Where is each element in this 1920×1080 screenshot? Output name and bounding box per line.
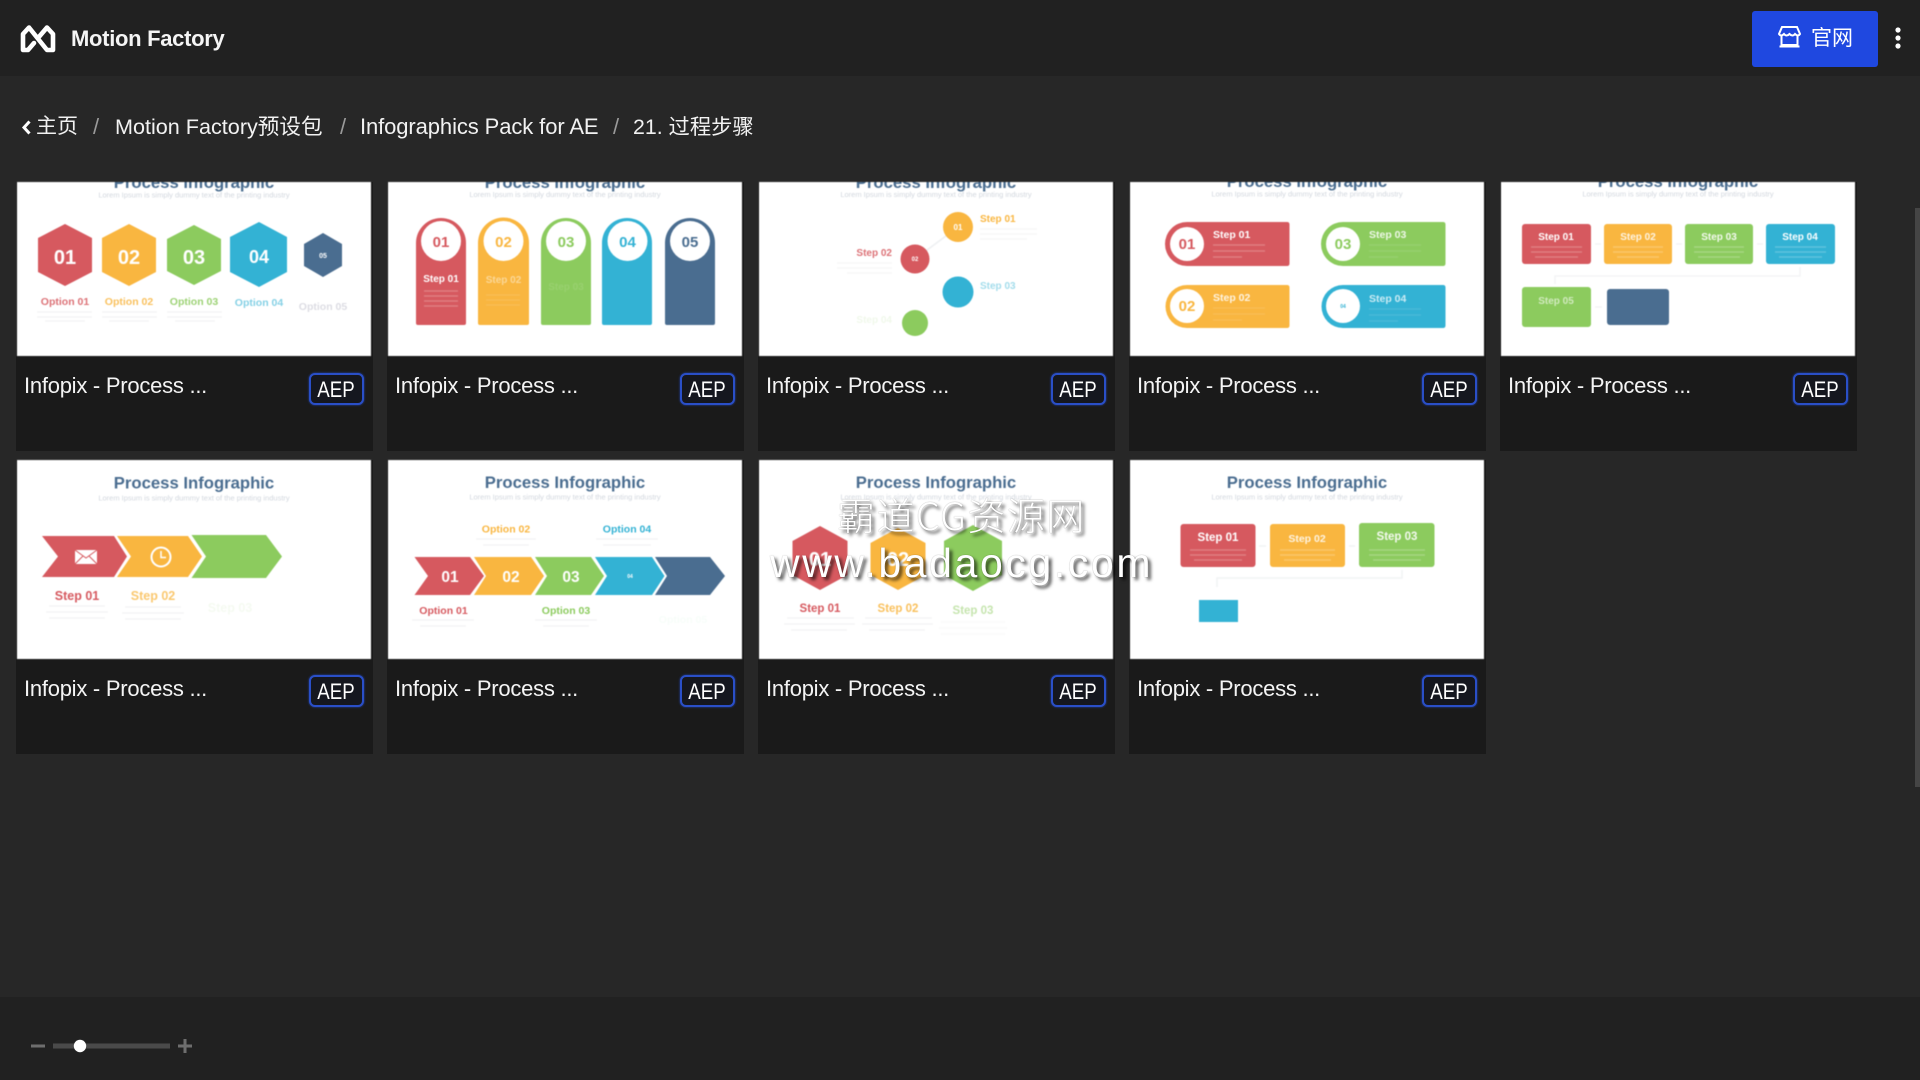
card 1: hexagon options: [16, 182, 373, 451]
thumbnail: step boxes: Lorem Ipsum is simply dummy text of the printing industry: [1211, 492, 1403, 502]
thumbnail: five arrows: 03: [562, 569, 580, 586]
AEP badge: AEP: [318, 377, 355, 402]
AEP badge: AEP: [689, 679, 726, 704]
AEP badge: [309, 675, 364, 707]
thumbnail: step boxes: Step 02: [1288, 533, 1326, 545]
thumbnail: three hexagons: Lorem Ipsum is simply dummy text of the printing industry: [840, 492, 1032, 502]
AEP badge: [1051, 373, 1106, 405]
thumbnail: hexagons: 04: [249, 247, 269, 267]
breadcrumb separator: /: [340, 114, 346, 139]
AEP badge: AEP: [1431, 679, 1468, 704]
AEP badge: AEP: [1802, 377, 1839, 402]
thumbnail: pillars: 01: [433, 234, 449, 251]
scrollbar: [1915, 208, 1920, 787]
thumbnail: pillars: Step 01: [423, 274, 459, 285]
thumbnail: three hexagons: Step 02: [878, 603, 918, 615]
thumbnail: zigzag circles: Step 01: [980, 214, 1016, 225]
thumbnail: pillars: Lorem Ipsum is simply dummy text of the printing industry: [469, 190, 661, 199]
thumbnail: three hexagons: 02: [887, 549, 909, 571]
thumbnail: five arrows: Process Infographic: [485, 473, 645, 492]
thumbnail: step tags: 04: [1340, 304, 1346, 310]
card 8: three hexagons: [758, 460, 1115, 754]
thumbnail: five arrows: [388, 460, 742, 659]
thumbnail: chevron icons: Step 01: [55, 589, 99, 603]
card 3: zigzag circles: [758, 182, 1115, 451]
thumbnail: hexagons: Option 04: [235, 297, 283, 309]
thumbnail: five arrows: 04: [627, 574, 633, 580]
thumbnail: zigzag circles: 01: [954, 223, 963, 232]
thumbnail: hexagons: 05: [319, 253, 327, 260]
thumbnail: five arrows: Option 02: [482, 524, 530, 536]
breadcrumb separator: /: [613, 114, 619, 139]
thumbnail: flow boxes: Lorem Ipsum is simply dummy text of the printing industry: [1582, 190, 1774, 198]
card title: Infopix - Process ...: [24, 676, 207, 701]
card title: Infopix - Process ...: [1137, 373, 1320, 398]
thumbnail: hexagons: Lorem Ipsum is simply dummy text of the printing industry: [98, 190, 290, 200]
thumbnail: step tags: Step 02: [1213, 292, 1251, 304]
thumbnail: zigzag circles: Lorem Ipsum is simply dummy text of the printing industry: [840, 190, 1032, 199]
header bar: [0, 0, 1920, 76]
card title: Infopix - Process ...: [1508, 373, 1691, 398]
zoom slider: [31, 1039, 192, 1053]
thumbnail: five arrows: Lorem Ipsum is simply dummy text of the printing industry: [469, 492, 661, 502]
thumbnail: step boxes: Step 03: [1377, 531, 1417, 543]
thumbnail: flow boxes: Step 01: [1538, 232, 1574, 243]
breadcrumb: current step: 21. 过程步骤: [633, 115, 754, 139]
thumbnail: step tags: 02: [1179, 298, 1195, 315]
thumbnail: three hexagons: Process Infographic: [856, 473, 1016, 492]
breadcrumb: infographics pack: Infographics Pack for AE: [360, 114, 599, 139]
thumbnail: step tags: Lorem Ipsum is simply dummy text of the printing industry: [1211, 190, 1403, 198]
thumbnail: step boxes: [1130, 460, 1484, 659]
thumbnail: step tags: [1130, 182, 1484, 356]
AEP badge: [1793, 373, 1848, 405]
thumbnail: flow boxes: Step 03: [1701, 232, 1737, 243]
thumbnail: hexagons: Option 03: [170, 296, 218, 308]
thumbnail: step tags: Step 04: [1369, 293, 1407, 305]
thumbnail: five arrows: Option 05: [659, 614, 707, 626]
AEP badge: AEP: [318, 679, 355, 704]
watermark line: url: www.badaocg.com: [770, 540, 1153, 586]
thumbnail: chevron icons: Lorem Ipsum is simply dummy text of the printing industry: [98, 494, 290, 502]
AEP badge: AEP: [1060, 679, 1097, 704]
thumbnail: step boxes: Step 01: [1198, 532, 1239, 544]
AEP badge: [309, 373, 364, 405]
thumbnail: flow boxes: Step 04: [1782, 232, 1818, 243]
thumbnail: hexagons: Option 01: [41, 296, 89, 308]
AEP badge: [1422, 675, 1477, 707]
brand name: Motion Factory: [71, 26, 224, 51]
icon: store: [1778, 26, 1801, 48]
card title: Infopix - Process ...: [24, 373, 207, 398]
AEP badge: [680, 373, 735, 405]
breadcrumb navigation: [22, 114, 754, 139]
breadcrumb separator: /: [93, 114, 99, 139]
thumbnail: pillars: Step 03: [548, 282, 584, 293]
website button: [1752, 11, 1878, 67]
thumbnail: three hexagons: 01: [809, 549, 831, 571]
thumbnail: pillars: 05: [682, 234, 698, 251]
AEP badge: [1051, 675, 1106, 707]
thumbnail: hexagons: 01: [54, 247, 76, 269]
card title: Infopix - Process ...: [766, 373, 949, 398]
thumbnail: chevron icons: [17, 460, 371, 659]
watermark: [770, 486, 1154, 591]
card title: Infopix - Process ...: [766, 676, 949, 701]
AEP badge: AEP: [1060, 377, 1097, 402]
thumbnail: zigzag circles: Step 04: [856, 315, 892, 326]
AEP badge: AEP: [1431, 377, 1468, 402]
thumbnail: pillars: 04: [619, 234, 636, 251]
thumbnail: step tags: 01: [1179, 236, 1195, 253]
thumbnail: step tags: Step 03: [1369, 229, 1407, 241]
thumbnail: flow boxes: Step 02: [1620, 232, 1656, 243]
thumbnail: step tags: Step 01: [1213, 229, 1251, 241]
thumbnail: hexagons: Option 05: [299, 301, 347, 313]
thumbnail: hexagons: [17, 182, 371, 356]
thumbnail: five arrows: Option 01: [419, 605, 468, 617]
button label: 官网: [1811, 27, 1853, 50]
card title: Infopix - Process ...: [395, 676, 578, 701]
AEP badge: [680, 675, 735, 707]
breadcrumb: home: 主页: [36, 115, 78, 138]
thumbnail: zigzag circles: Step 03: [980, 281, 1016, 292]
breadcrumb: preset pack: Motion Factory预设包: [115, 114, 323, 139]
thumbnail: five arrows: 01: [441, 569, 459, 586]
thumbnail: three hexagons: [759, 460, 1113, 659]
thumbnail: flow boxes: [1501, 182, 1855, 356]
thumbnail: zigzag circles: Step 02: [856, 248, 892, 259]
card 6: arrow chevrons with icons: [16, 460, 373, 754]
footer bar: [0, 997, 1920, 1080]
thumbnail: pillars: 02: [495, 234, 512, 251]
thumbnail: pillars: [388, 182, 742, 356]
icon: more menu dots: [1895, 27, 1901, 49]
thumbnail: chevron icons: Process Infographic: [114, 474, 274, 492]
thumbnail: pillars: 03: [558, 234, 574, 251]
card title: Infopix - Process ...: [1137, 676, 1320, 701]
card 2: numbered pillars: [387, 182, 744, 451]
thumbnail: flow boxes: Step 05: [1538, 296, 1574, 307]
thumbnail: hexagons: 02: [118, 247, 140, 269]
card 4: rounded step tags: [1129, 182, 1486, 451]
card title: Infopix - Process ...: [395, 373, 578, 398]
thumbnail: five arrows: 02: [502, 569, 520, 586]
AEP badge: [1422, 373, 1477, 405]
AEP badge: AEP: [689, 377, 726, 402]
thumbnail: chevron icons: Step 02: [131, 589, 175, 603]
card 7: five arrow process: [387, 460, 744, 754]
thumbnail: hexagons: Option 02: [105, 296, 153, 308]
icon: Motion Factory logo: [20, 25, 56, 52]
thumbnail: chevron icons: Step 03: [208, 601, 252, 615]
thumbnail: zigzag circles: [759, 182, 1113, 356]
card 9: three step boxes: [1129, 460, 1486, 754]
thumbnail: three hexagons: Step 03: [953, 605, 993, 617]
thumbnail: five arrows: Option 04: [603, 524, 651, 536]
thumbnail: three hexagons: Step 01: [800, 603, 841, 615]
thumbnail: five arrows: Option 03: [542, 605, 590, 617]
thumbnail: zigzag circles: 02: [912, 257, 919, 263]
thumbnail: step boxes: Process Infographic: [1227, 473, 1387, 492]
thumbnail: step tags: 03: [1335, 236, 1351, 253]
icon: back chevron: [22, 120, 30, 134]
thumbnail: pillars: Step 02: [486, 275, 522, 286]
thumbnail: hexagons: 03: [183, 247, 205, 269]
watermark line: site name: 霸道CG资源网: [837, 486, 1086, 541]
card 5: flow boxes: [1500, 182, 1857, 451]
